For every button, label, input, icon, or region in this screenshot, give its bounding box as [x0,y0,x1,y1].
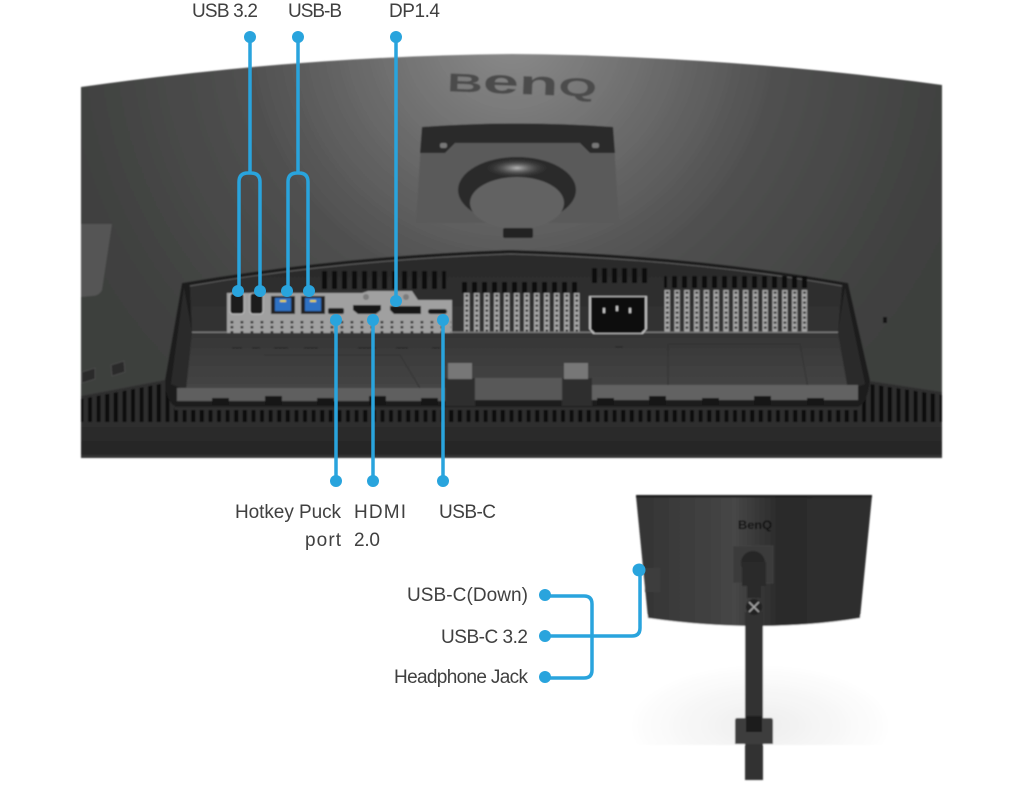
stand ball joint [746,599,762,615]
silver I/O plate [227,291,452,333]
left side panel detail [81,224,112,297]
small monitor with stand [620,495,900,780]
small monitor back [636,496,872,626]
stand column [745,612,763,734]
callout bracket: side ports [539,564,646,683]
monitor back shell [81,54,942,457]
floor labels and raised panel [232,344,808,388]
lower vent strip [81,380,942,428]
BenQ logo: B en Q [446,61,598,105]
hinge [741,551,766,598]
label: Hotkey Puck port [235,502,342,551]
mount plate [733,546,773,583]
rim lip [177,378,858,401]
stand mount recess [416,124,619,238]
callouts top: USB 3.2 [232,31,266,297]
side port block [645,568,660,592]
label: Hotkey Puck port: Hotkey Puck [235,502,342,523]
label: Hotkey Puck port: port [305,530,342,551]
bay back wall [190,255,842,333]
USB 3.2 ports [230,293,263,314]
DisplayPort [390,306,421,314]
label: USB-C(Down): USB-C(Down) [407,585,528,606]
large monitor rear view [81,54,942,458]
USB-C port [428,309,447,314]
label: HDMI 2.0: 2.0 [354,530,380,551]
right side screw hole [883,317,887,323]
upper vent slots [320,268,809,293]
bay floor [186,333,848,390]
label: USB-C 3.2: USB-C 3.2 [441,627,528,648]
USB-B ports [271,296,325,314]
clamp base [735,718,773,744]
lip clips [212,396,824,405]
callouts top: USB-B [281,31,315,297]
bottom bezel band [81,427,942,458]
top bezel line [636,495,872,498]
perforated vent column groups [192,290,838,333]
callout top: DP1.4 [390,31,402,307]
label: DP1.4: DP1.4 [389,1,440,22]
label: USB 3.2: USB 3.2 [192,1,258,22]
rear buttons [82,361,125,383]
label: USB-C: USB-C [439,502,496,523]
callouts bottom: Hotkey Puck, HDMI, USB-C [330,314,449,487]
column foot shadow [746,716,762,732]
label: USB-B: USB-B [288,1,342,22]
small BenQ logo: BenQ [738,518,772,532]
connector bay recess [165,250,870,407]
micro port [328,308,344,314]
center cable clips [445,363,592,406]
HDMI port [353,305,381,314]
floor shadow [620,615,900,745]
label: Headphone Jack: Headphone Jack [394,667,528,688]
power socket [589,296,647,334]
plate screws [363,294,409,300]
bay side walls [171,288,865,390]
label: HDMI 2.0: HDMI [354,502,406,523]
label: HDMI 2.0 [354,502,406,551]
bay top rim highlight [190,254,842,286]
clamp lower [745,744,763,780]
